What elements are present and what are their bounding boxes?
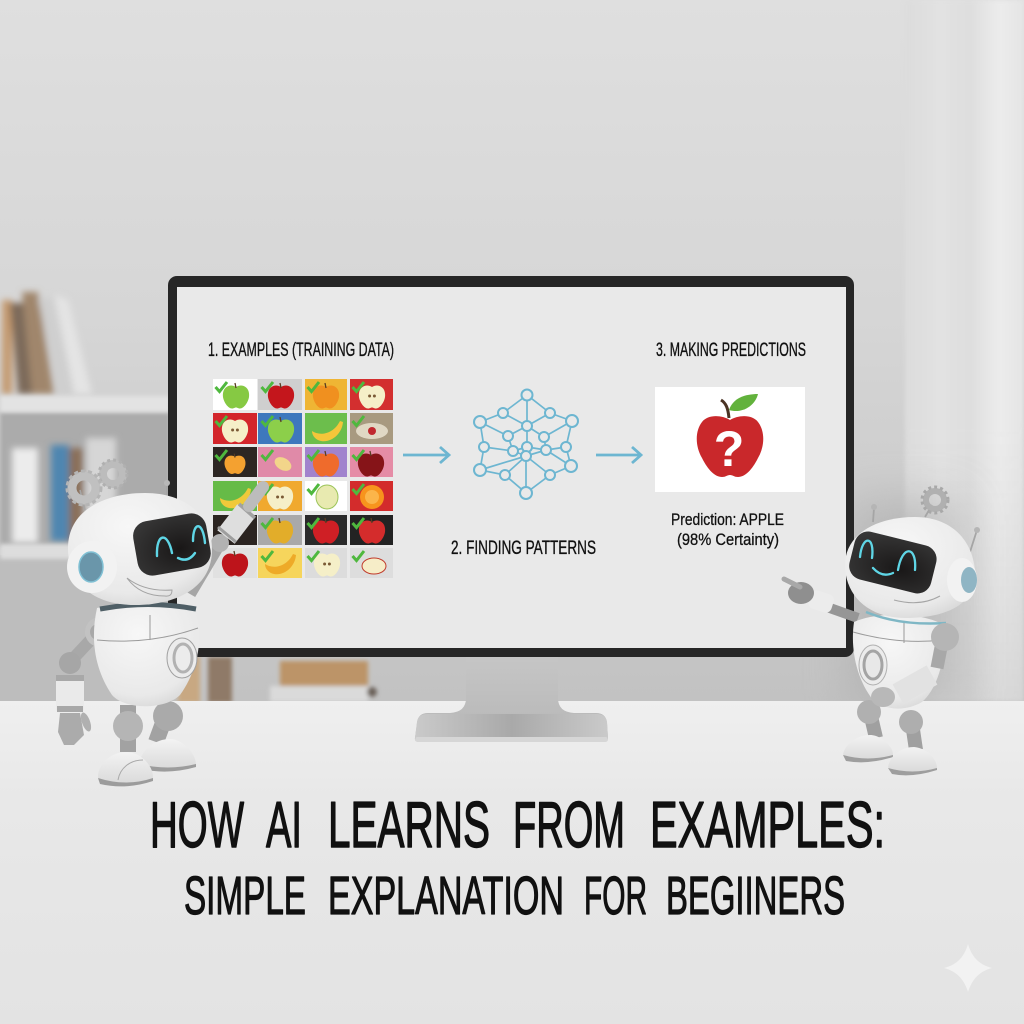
title: FROM (513, 788, 625, 861)
right robot: legs and feet (843, 700, 937, 775)
fruit image grid (213, 379, 393, 578)
prediction text: Prediction: APPLE (671, 510, 784, 529)
title: HOW (150, 788, 244, 861)
left robot: ear (67, 541, 117, 593)
subtitle: BEGIINERS (666, 866, 845, 926)
subtitle: EXPLANATION (328, 866, 564, 926)
prediction panel: apple with question mark: ? (714, 421, 744, 477)
right robot: head (845, 517, 977, 618)
row 6 (213, 548, 393, 578)
left robot: smiling face (157, 526, 205, 560)
right robot: ear (947, 558, 977, 602)
monitor stand (415, 655, 608, 742)
icon: neural network (474, 390, 578, 499)
row 2 (213, 413, 393, 444)
blurred objects below monitor (178, 657, 377, 703)
right robot: side arm (871, 623, 959, 707)
blurred bookshelf (0, 292, 170, 702)
right robot (784, 487, 980, 775)
subtitle: SIMPLE (184, 866, 306, 926)
row 3 (213, 447, 393, 477)
right robot: gear and antennas (871, 487, 980, 552)
arrow: examples to patterns (403, 447, 449, 463)
icon: sparkle (944, 944, 992, 992)
wall background (0, 0, 1024, 702)
right robot: visor (846, 529, 940, 596)
left robot (56, 460, 263, 786)
prediction text: (98% Certainty) (677, 530, 779, 549)
heading: step 1: 1. EXAMPLES (TRAINING DATA) (208, 340, 394, 361)
right robot: smiling face (860, 541, 915, 575)
screen (177, 287, 846, 648)
table (0, 701, 1024, 1024)
left robot: legs and feet (98, 701, 196, 786)
right robot: pointing arm (784, 579, 858, 618)
arrow: patterns to prediction (596, 447, 641, 463)
title: AI (266, 788, 302, 861)
subtitle (184, 866, 845, 926)
prediction text (671, 510, 784, 549)
left robot: raised arm (190, 487, 263, 594)
title: LEARNS (328, 788, 490, 861)
title: EXAMPLES: (650, 788, 885, 861)
row 5 (213, 515, 393, 545)
label: step 2: 2. FINDING PATTERNS (451, 538, 596, 559)
heading: step 3: 3. MAKING PREDICTIONS (656, 340, 806, 361)
left robot: body (94, 604, 199, 706)
wall shadow behind right robot (850, 500, 960, 710)
curtain (905, 0, 1024, 702)
row 4 (213, 481, 393, 511)
right robot: body (853, 612, 946, 709)
left robot: visor (131, 511, 213, 578)
left robot: gears and antennas (67, 460, 170, 510)
title (150, 788, 885, 861)
left robot: head (67, 493, 213, 605)
prediction panel: apple with question mark (655, 387, 805, 492)
row 1 (213, 379, 393, 410)
monitor (168, 276, 854, 657)
subtitle: FOR (584, 866, 647, 926)
left robot: lowered arm (56, 617, 115, 745)
